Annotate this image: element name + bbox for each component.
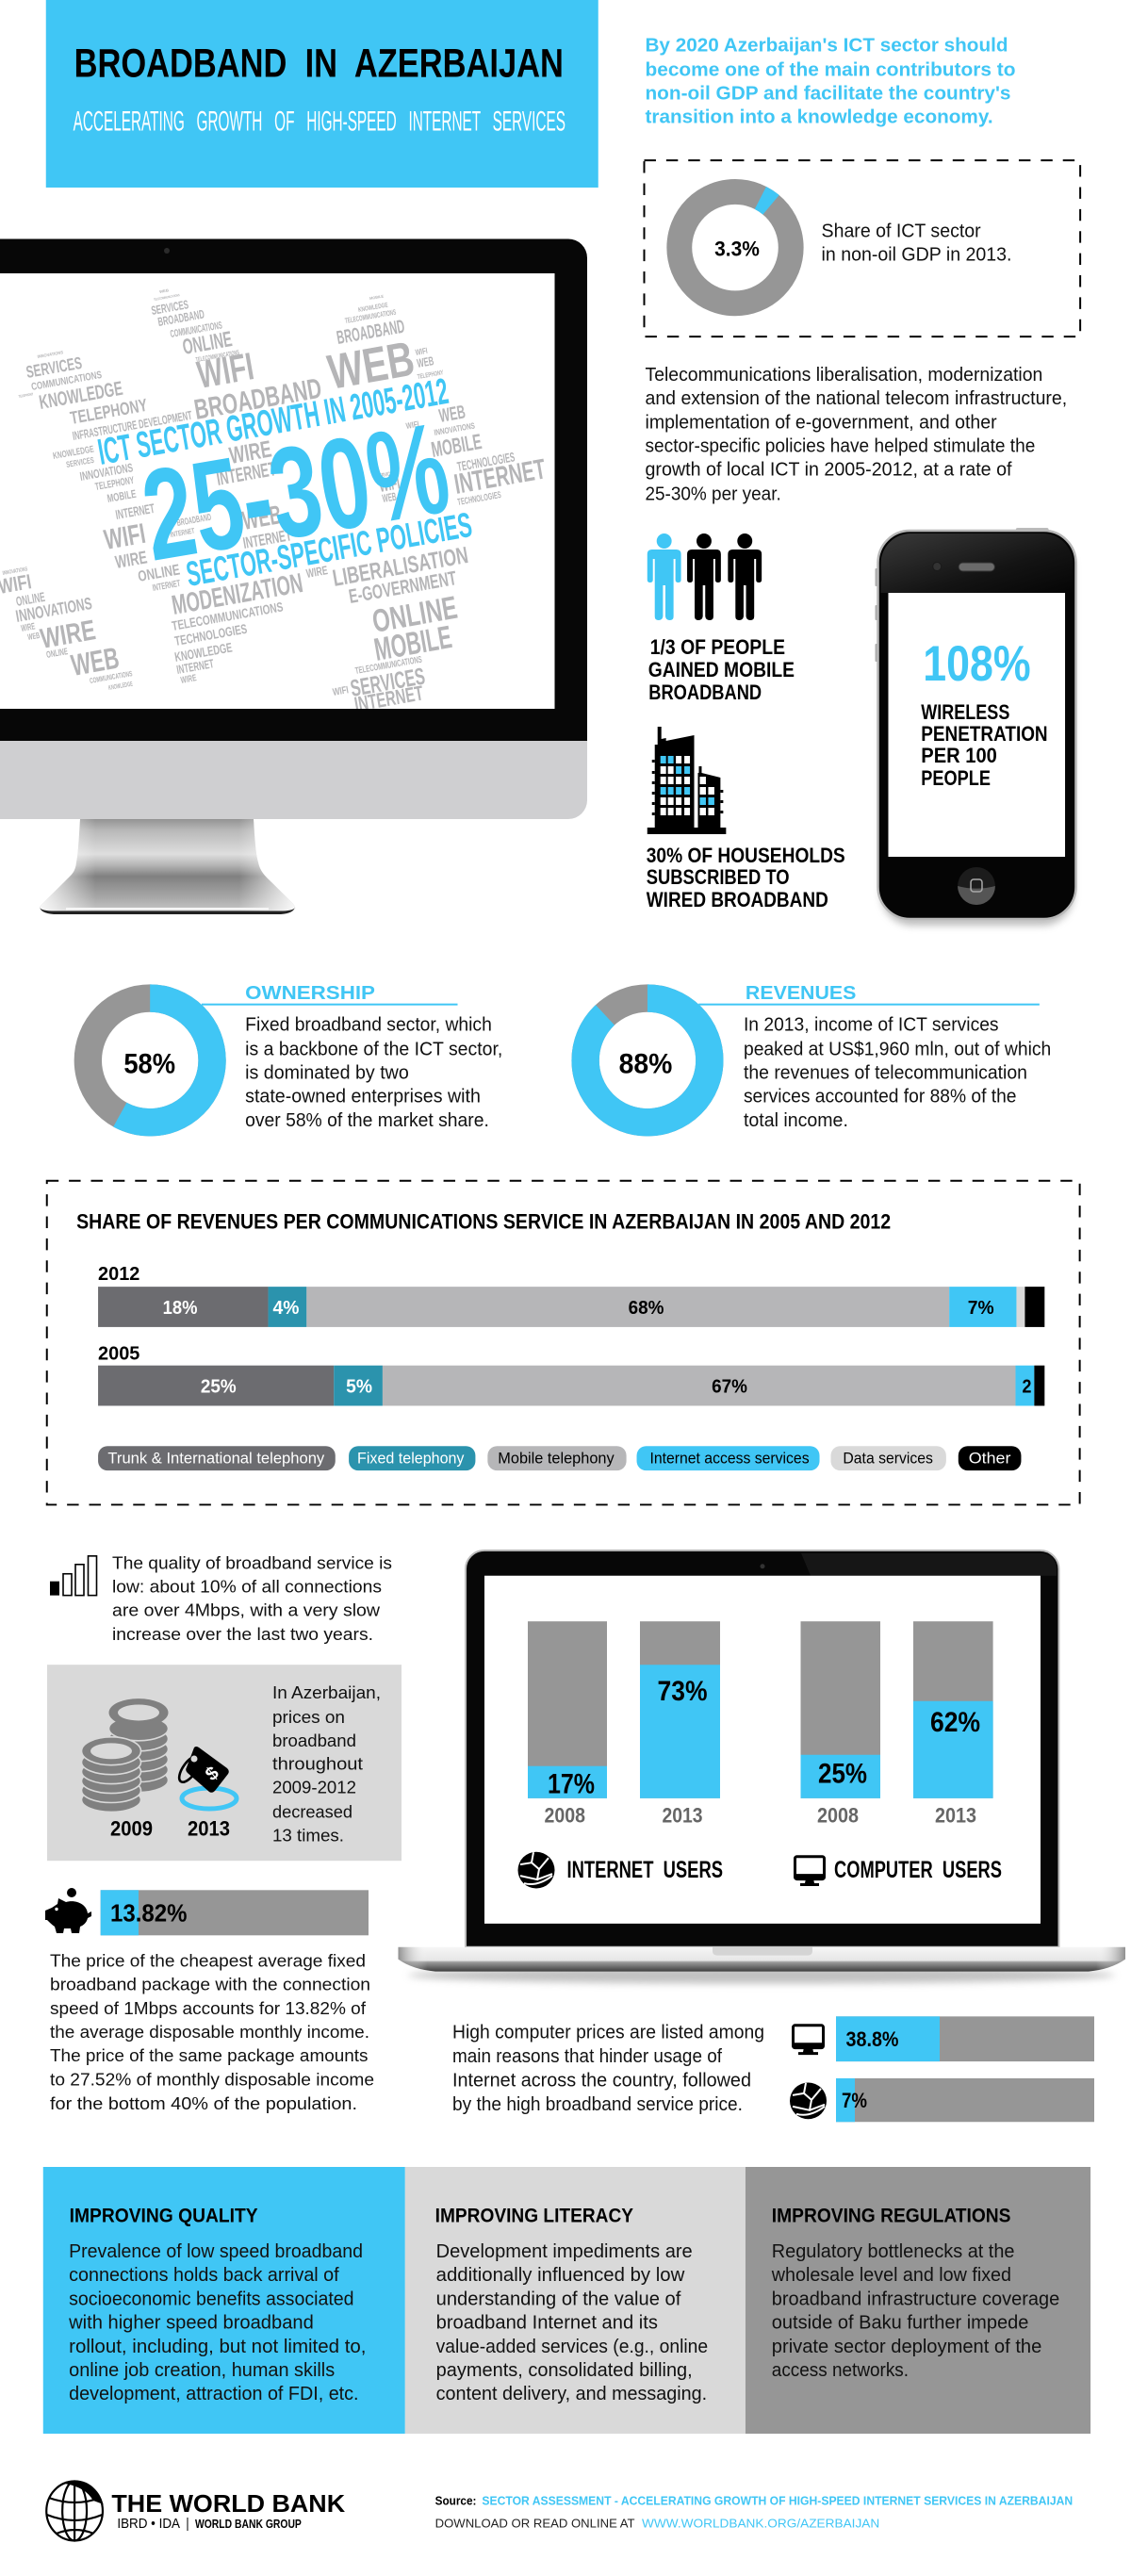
word cloud: COMMUNICATIONS [170,320,223,340]
logo: The World Bank: WORLD BANK GROUP [195,2517,302,2531]
word cloud: MOBILE [371,619,454,668]
stat: wired broadband: WIRED BROADBAND [647,888,828,911]
body text: value-added services (e.g., online [436,2337,708,2357]
intro text: become one of the main contributors to [645,60,1015,81]
bar: 13.82%: 13.82% [110,1899,187,1928]
word cloud: BROADBAND [176,513,212,529]
paragraph: policies: growth of local ICT in 2005-2012, at a rate of [645,459,1012,480]
bar: 2012: 68% [629,1298,664,1319]
word cloud: BROADBAND [192,373,324,426]
word cloud: BROADBAND [336,317,406,349]
bar: 2005: 25% [201,1377,237,1398]
text: computer prices: by the high broadband service price. [452,2094,743,2115]
laptop screen [484,1576,1041,1924]
word cloud: SERVICES [25,353,83,382]
text: computer prices: High computer prices are listed among [452,2023,764,2043]
word cloud: WEB [69,641,122,682]
legend: Trunk & International telephony [107,1450,325,1468]
stat: mobile broadband [648,635,795,704]
monitor stand [40,819,295,914]
word cloud: MOBILE [430,429,484,462]
word cloud: BROADBAND [156,306,205,329]
icon: coin stacks [81,1698,168,1812]
word cloud: INTERNET [215,458,278,490]
body text: connections holds back arrival of [69,2265,339,2286]
word cloud: WIFI [102,518,148,556]
body text: wholesale level and low fixed [771,2265,1011,2286]
word cloud: INTERNET [241,526,293,552]
word cloud: INNOVATIONS [2,566,28,577]
price text: decreased [272,1802,352,1822]
chart: internet users [528,1621,720,1827]
word cloud headline [95,371,475,594]
phone screen [888,593,1065,857]
bar: 2012: 7% [968,1298,994,1319]
chart: internet users: 2008 [544,1803,585,1827]
text: quality of service: low: about 10% of all connections [112,1578,382,1598]
body text: outside of Baku further impede [772,2312,1028,2334]
revenues text: services accounted for 88% of the [744,1087,1016,1108]
revenues text: peaked at US$1,960 mln, out of which [744,1039,1051,1059]
years [110,1816,230,1840]
body text: content delivery, and messaging. [436,2384,707,2404]
word cloud: LIBERALISATION [331,542,470,592]
icon: globe [518,1852,554,1889]
body text: broadband Internet and its [436,2312,658,2334]
body text: rollout, including, but not limited to, [69,2337,367,2357]
price text: 13 times. [272,1826,344,1846]
text: cheapest package: speed of 1Mbps accounts for 13.82% of [50,1999,367,2019]
years: 2009 [110,1816,153,1840]
word cloud: WIRE [114,548,149,573]
revenues text: total income. [744,1110,848,1131]
word cloud: TELEPHONY [69,396,149,429]
legend: Data services [843,1450,933,1468]
heading: IMPROVING LITERACY [435,2205,633,2227]
word cloud: INTERNET [352,681,425,716]
source line: Source: [435,2493,476,2508]
body text: with higher speed broadband [68,2312,314,2334]
donut caption: Share of ICT sector [822,222,981,242]
word cloud: WEB [416,353,434,370]
word cloud: INTERNET [452,453,548,500]
chart: computer users [801,1621,993,1827]
price text [272,1683,381,1846]
word cloud: ONLINE [45,647,69,661]
word cloud: WIRE [21,621,36,634]
word cloud: INNOVATIONS [14,594,93,626]
body text: understanding of the value of [436,2289,681,2310]
text: cheapest package: The price of the cheapest average fixed [50,1952,366,1972]
body text: payments, consolidated billing, [436,2360,693,2381]
body text: online job creation, human skills [69,2360,335,2381]
label: internet users: INTERNET USERS [567,1857,723,1883]
body text [68,2241,367,2404]
ownership text: is dominated by two [245,1062,409,1083]
heading: IMPROVING REGULATIONS [772,2205,1011,2227]
wireless penetration label: PER 100 [921,744,997,767]
body text [771,2241,1059,2381]
word cloud: ONLINE [369,590,460,640]
text: cheapest package: the average disposable monthly income. [50,2023,369,2043]
text: computer prices [452,2023,764,2115]
word cloud: TELECOMMUNICATIONS [344,308,397,325]
word cloud: E-GOVERNMENT [347,567,458,608]
word cloud: WIFI [415,346,428,357]
word cloud: SERVICES [150,297,189,318]
legend: Other [969,1450,1011,1468]
word cloud: KNOWLEDGE [108,681,134,692]
panel: price decrease [47,1665,402,1861]
text: cheapest package: broadband package with the connection [50,1976,370,1994]
stat: mobile broadband: 1/3 OF PEOPLE [650,635,785,659]
word cloud: KNOWLEDGE [173,639,234,665]
source line: SECTOR ASSESSMENT - ACCELERATING GROWTH OF HIGH-SPEED INTERNET SERVICES IN AZERBAIJAN [482,2493,1073,2508]
stat: wired broadband [647,844,845,911]
text: quality of service: The quality of broadband service is [112,1553,392,1573]
paragraph: policies: implementation of e-government, and other [645,413,997,434]
word cloud: INNOVATIONS [79,460,134,484]
word cloud: WEB [26,631,41,642]
bar: 38.8%: 38.8% [846,2027,898,2051]
icon: buildings [647,727,726,834]
word cloud: INTERNET [152,579,181,594]
word cloud: MOBILE [369,293,385,301]
panel: revenue share chart [47,1181,1080,1504]
stat: wired broadband: 30% OF HOUSEHOLDS [647,844,845,867]
body text: Development impediments are [436,2241,693,2262]
legend: Mobile telephony [498,1450,615,1468]
word cloud: KNOWLEDGE [358,302,388,314]
word cloud: KNOWLEDGE [52,444,95,462]
word cloud: MODENIZATION [170,568,305,621]
word cloud: WEB [437,402,467,427]
word cloud: ONLINE [181,326,234,359]
word cloud: WIRE [227,435,273,469]
price text: 2009-2012 [272,1779,356,1798]
panel: improving literacy [405,2167,746,2434]
bar: 2005: 2005 [98,1344,139,1365]
donut chart: 3.3%: 3.3% [714,238,760,261]
laptop [398,1551,1125,1984]
body text: private sector deployment of the [772,2337,1041,2357]
word cloud: WEB [381,490,398,505]
donut chart: 88%: 88% [619,1048,672,1079]
text: cheapest package: to 27.52% of monthly disposable income [50,2071,374,2090]
donut chart: 58% [88,998,212,1123]
text: computer prices: Internet across the country, followed [452,2070,751,2091]
word cloud: INNOVATIONS [434,420,476,437]
text: cheapest package [50,1952,374,2114]
intro text [645,36,1015,127]
icon: price tag and ring [175,1747,237,1809]
body text: development, attraction of FDI, etc. [69,2384,359,2404]
word cloud: MOBILE [107,487,137,505]
download line: DOWNLOAD OR READ ONLINE AT [435,2516,635,2531]
ownership text: state-owned enterprises with [245,1087,481,1108]
body text: socioeconomic benefits associated [69,2289,354,2310]
smartphone [876,528,1075,926]
word cloud: TELECOMMUNICATIONS [354,655,423,677]
word cloud: WIFI [194,344,257,397]
word cloud: SERVICES [65,455,94,469]
wireless penetration label: WIRELESS [921,700,1009,724]
bar: 2012: 4% [273,1298,300,1319]
legend [98,1446,1021,1470]
chart: internet users: 2013 [662,1803,703,1827]
bar: 2005: 2 [1022,1377,1031,1398]
word cloud: WIFI [378,473,402,496]
word cloud: INTERNET [175,656,215,677]
icon: computer monitor [795,1857,825,1886]
donut caption [822,222,1011,266]
donut chart: 58%: 58% [123,1048,175,1079]
bar: 7%: 7% [842,2089,867,2112]
revenues text: the revenues of telecommunication [744,1062,1027,1083]
revenues text [744,1015,1051,1131]
icon: price tag and ring: $ [202,1763,223,1785]
icon: computer monitor small [793,2026,824,2055]
word cloud headline: 25-30% [133,395,458,588]
price text: In Azerbaijan, [272,1683,381,1703]
word cloud: ONLINE [137,562,181,585]
stat: wireless penetration: 108% [923,636,1031,692]
text: cheapest package: for the bottom 40% of the population. [50,2094,357,2114]
chart title: SHARE OF REVENUES PER COMMUNICATIONS SERVICE IN AZERBAIJAN IN 2005 AND 2012 [76,1209,891,1233]
word cloud: WEB [323,331,418,400]
bar: 2005 [98,1344,1044,1405]
download line [435,2516,879,2531]
wireless penetration label [921,700,1048,790]
word cloud: WEB [159,287,169,294]
desktop monitor [0,239,587,914]
bar: 13.82% [101,1890,369,1935]
body text: additionally influenced by low [436,2265,685,2286]
word cloud: COMMUNICATIONS [89,669,133,685]
word cloud: KNOWLEDGE [38,378,124,414]
word cloud: TELECOMMUNICATIONS [195,350,240,364]
panel: improving regulations [746,2167,1090,2434]
bar: 2005: 5% [346,1377,372,1398]
word cloud: TECHNOLOGIES [457,490,502,508]
bar: 7% [836,2078,1094,2122]
revenues heading: REVENUES [746,983,856,1004]
paragraph: policies: sector-specific policies have helped stimulate the [645,436,1035,457]
wireless penetration label: PENETRATION [921,722,1048,746]
intro text: non-oil GDP and facilitate the country's [645,83,1011,104]
intro text: transition into a knowledge economy. [645,107,993,127]
chart: computer users: 2008 [817,1803,859,1827]
icon: globe small [790,2082,827,2119]
text: quality of service: increase over the last two years. [112,1625,373,1645]
donut chart: 88% [585,998,710,1123]
body text [436,2241,708,2404]
wireless penetration label: PEOPLE [921,766,991,790]
heading: IMPROVING QUALITY [70,2205,258,2227]
word cloud: TECHNOLOGIES [456,449,516,474]
legend: Fixed telephony [357,1450,465,1468]
laptop base [398,1947,1125,1972]
paragraph: policies: and extension of the national telecom infrastructure, [645,388,1067,409]
chart: computer users: 62% [930,1707,980,1738]
chart: internet users: 17% [548,1769,595,1800]
panel: improving quality [43,2167,405,2434]
body text: Prevalence of low speed broadband [69,2241,363,2262]
word cloud: WIRE [180,673,198,686]
bar: 2012: 18% [163,1298,198,1319]
body text: access networks. [772,2360,909,2381]
word cloud: WIRE [305,563,329,581]
paragraph: policies: Telecommunications liberalisation, modernization [645,365,1042,386]
chart: computer users: 25% [818,1759,867,1790]
icon: signal bars [50,1556,96,1596]
panel: ICT share in GDP [644,160,1080,336]
word cloud: COMMUNICATIONS [30,369,103,393]
chart: computer users: 2013 [935,1803,976,1827]
price text: prices on [272,1708,345,1728]
word cloud: INNOVATIONS [37,350,63,359]
word cloud: TELECOMMUNICATIONS [171,599,284,633]
subtitle: ACCELERATING GROWTH OF HIGH-SPEED INTERNET SERVICES [74,106,566,137]
ownership text: over 58% of the market share. [245,1110,489,1131]
panel: revenues [585,983,1051,1131]
word cloud [0,287,548,716]
icon: world bank globe [46,2481,103,2541]
word cloud: INTERNET [114,500,156,522]
text: computer prices: main reasons that hinder usage of [452,2046,722,2067]
text: quality of service: are over 4Mbps, with a very slow [112,1601,380,1621]
icon: three people [647,533,762,620]
monitor screen [0,273,554,709]
word cloud: SERVICES [377,471,395,480]
chart: internet users: 73% [658,1676,708,1707]
ownership heading: OWNERSHIP [245,983,375,1004]
body text: broadband infrastructure coverage [772,2289,1059,2310]
word cloud: WIFI [332,684,350,698]
body text: Regulatory bottlenecks at the [772,2241,1014,2262]
logo: The World Bank: IBRD • IDA [117,2516,180,2532]
price text: broadband [272,1731,356,1751]
word cloud: INTERNET [170,527,195,539]
ownership text: Fixed broadband sector, which [245,1015,492,1036]
word cloud: WIFI [405,419,419,431]
bar: 2012 [98,1264,1044,1327]
download line: WWW.WORLDBANK.ORG/AZERBAIJAN [642,2516,879,2531]
word cloud: TELECOMMUNICATIONS [154,293,180,302]
stat: mobile broadband: BROADBAND [648,681,762,704]
wordmark: THE WORLD BANK [111,2491,345,2518]
logo: The World Bank [46,2481,345,2541]
ownership text [245,1015,502,1131]
years: 2013 [188,1816,230,1840]
price text: throughout [272,1755,364,1775]
bar: 38.8% [836,2016,1094,2061]
header banner [46,0,598,188]
word cloud headline: ICT SECTOR GROWTH IN 2005-2012 [95,371,451,473]
panel: ownership [88,983,502,1131]
word cloud: SERVICES [349,663,427,702]
stat: wired broadband: SUBSCRIBED TO [647,865,790,889]
revenues text: In 2013, income of ICT services [744,1015,999,1036]
word cloud: TELEPHONY [18,391,34,399]
title: BROADBAND IN AZERBAIJAN [74,41,564,87]
text: cheapest package: The price of the same package amounts [50,2046,368,2066]
word cloud: TELEPHONY [94,475,136,493]
word cloud: TECHNOLOGIES [173,621,248,648]
word cloud: TELEPHONY [417,369,444,381]
legend: Internet access services [649,1450,810,1468]
bar: 2012: 2012 [98,1264,139,1285]
word cloud headline: SECTOR-SPECIFIC POLICIES [183,505,475,594]
intro text: By 2020 Azerbaijan's ICT sector should [645,36,1008,57]
word cloud: WEB [240,500,284,535]
word cloud: ONLINE [15,589,46,609]
text: quality of service [112,1553,392,1645]
word cloud: INFRASTRUCTURE DEVELOPMENT [72,408,193,443]
icon: piggy bank [45,1888,91,1933]
ownership text: is a backbone of the ICT sector, [245,1039,502,1059]
bar: 2005: 67% [712,1377,747,1398]
paragraph: policies: 25-30% per year. [645,484,781,504]
label: computer users: COMPUTER USERS [834,1857,1002,1883]
stat: mobile broadband: GAINED MOBILE [648,658,795,681]
word cloud: WIRE [38,615,98,655]
donut caption: in non-oil GDP in 2013. [822,245,1011,266]
paragraph: policies [645,365,1067,504]
donut chart: 3.3% [660,172,811,322]
